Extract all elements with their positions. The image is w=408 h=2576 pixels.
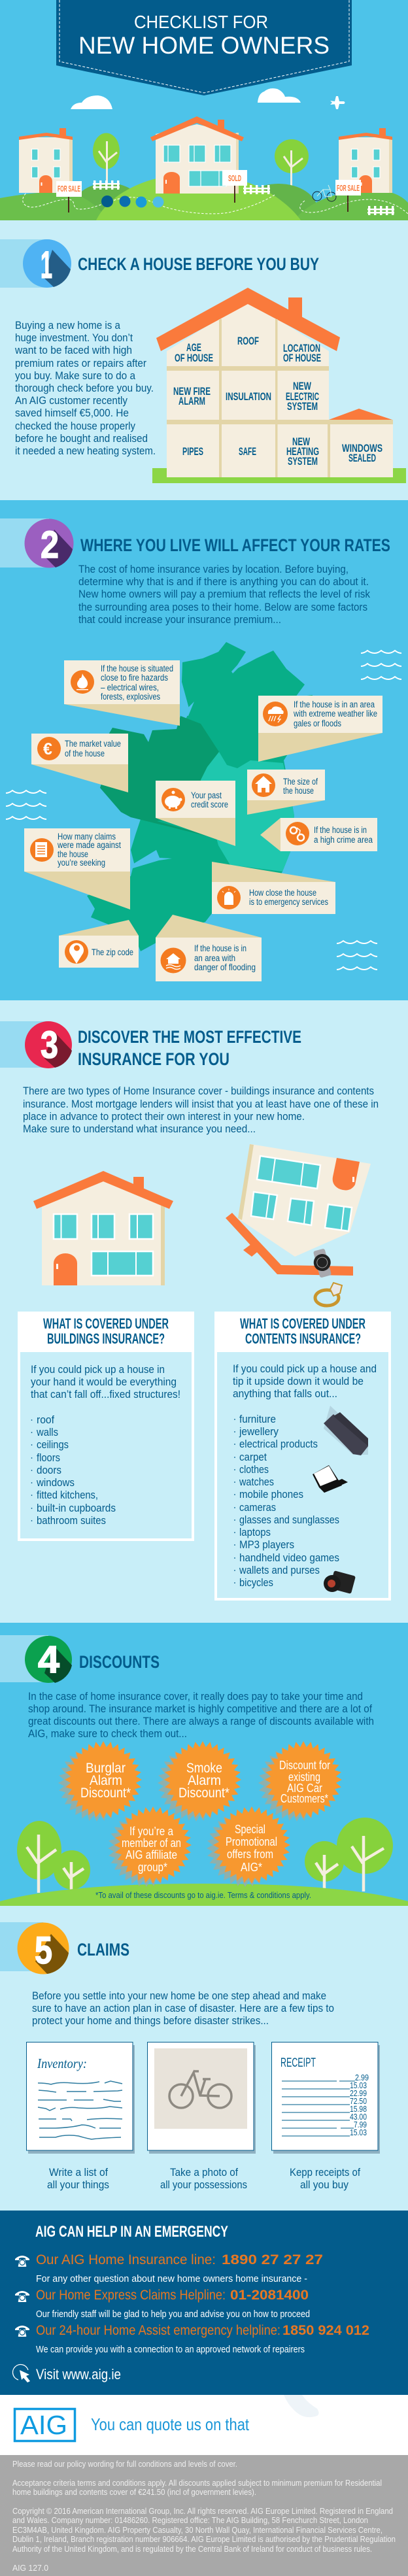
icon: euro: € [43, 740, 52, 758]
panel: buildings insurance: windows [36, 1476, 75, 1489]
badge: promotional offers: Promotional [226, 1835, 277, 1848]
icon: siren [217, 886, 241, 909]
caption: photo: all your possessions [160, 2178, 247, 2191]
panel: buildings insurance: If you could pick up a house in [31, 1363, 165, 1376]
card: receipt: 7.99 [354, 2120, 367, 2129]
icon: storm cloud [263, 702, 288, 726]
callout: claims history: How many claims [58, 832, 116, 841]
badge: burglar alarm: Alarm [90, 1773, 122, 1788]
heading 3 [78, 1027, 301, 1069]
panel: legal footer: and Wales. Company number: 01486260. Registered office: The AIG Building, 58 Fenchurch Street, London [12, 2516, 368, 2525]
caption: receipts [290, 2166, 360, 2191]
panel: buildings insurance [18, 1312, 194, 1541]
panel: contents insurance: laptops [239, 1526, 271, 1538]
house checklist diagram: NEW [292, 436, 310, 448]
helpline: home assist: Our 24-hour Home Assist emergency helpline: [36, 2323, 280, 2338]
panel: contents insurance: If you could pick up a house and [233, 1363, 377, 1375]
house checklist diagram: INSULATION [226, 391, 271, 403]
text: intro: In the case of home insurance cover, it really does pay to take your time and [28, 1690, 363, 1703]
badge: promotional offers: Special [235, 1823, 265, 1836]
callout: fire hazards: forests, explosives [101, 692, 160, 702]
footnote: *To avail of these discounts go to aig.ie. Terms & conditions apply. [95, 1890, 311, 1900]
panel: legal footer [0, 2455, 408, 2576]
text: intro: the surrounding area poses to their home. Below are some factors [78, 601, 367, 613]
panel: contents insurance: bicycles [239, 1576, 273, 1589]
panel: contents insurance: cameras [239, 1501, 276, 1514]
house checklist diagram [152, 288, 406, 483]
text: intro: shop around. The insurance market is highly competitive and there are a lot of [28, 1703, 372, 1715]
panel: legal footer: EC3M4AB, United Kingdom. AIG Property Casualty, 30 North Wall Quay, International Financial Services Centre, [12, 2526, 382, 2535]
badge: promotional offers: offers from [227, 1848, 273, 1861]
icon: piggy bank [162, 788, 185, 811]
callout: credit score: credit score [191, 800, 228, 809]
badge: smoke alarm: Smoke [186, 1761, 222, 1776]
panel: buildings insurance: bathroom suites [37, 1514, 106, 1527]
panel: contents insurance: MP3 players [239, 1538, 294, 1551]
text: intro: An AIG customer recently [15, 394, 128, 407]
illustration: upright house [33, 1171, 173, 1285]
heading 4: DISCOUNTS [79, 1652, 160, 1672]
panel: legal footer: Please read our policy wording for full conditions and levels of cover. [12, 2460, 237, 2469]
callout: extreme weather [258, 696, 382, 762]
heading 3: DISCOVER THE MOST EFFECTIVE [78, 1027, 301, 1047]
house checklist diagram: WINDOWS [342, 443, 382, 454]
house checklist diagram: SYSTEM [287, 401, 318, 413]
text: intro [28, 1690, 374, 1740]
panel: contents insurance: glasses and sunglasses [239, 1514, 339, 1526]
callout: flooding: If the house is in [194, 943, 246, 953]
panel: legal footer: Authority of the United Kingdom, and is regulated by the Central Bank of Ireland for conduct of business rules. [12, 2545, 372, 2554]
callout: flooding: danger of flooding [194, 962, 256, 972]
text: intro: sure to have an action plan in case of disaster. Here are a few tips to [32, 2002, 334, 2014]
card: receipt: 72.50 [350, 2096, 367, 2106]
badge: car customers: Discount for [279, 1759, 330, 1772]
helpline: insurance line: 1890 27 27 27 [222, 2252, 323, 2267]
heading 3: INSURANCE FOR YOU [78, 1049, 230, 1069]
text: repairers: We can provide you with a connection to an approved network of repairers [36, 2344, 305, 2355]
text: intro: thorough check before you buy. [15, 382, 154, 394]
icon: house [252, 773, 275, 797]
house checklist diagram: AGE [186, 342, 201, 354]
icon: bicycle [313, 185, 336, 201]
panel: contents insurance: watches [239, 1476, 274, 1488]
icon: document [30, 838, 54, 862]
callout: credit score [156, 781, 235, 846]
house checklist diagram: NEW FIRE [173, 386, 211, 398]
icon: camera [324, 1570, 356, 1594]
card: inventory [26, 2042, 135, 2154]
text: intro [23, 1085, 379, 1135]
text: friendly staff: Our friendly staff will be glad to help you and advise you on how to proceed [36, 2309, 310, 2320]
callout: extreme weather: gales or floods [294, 719, 341, 728]
text: intro: you buy. Make sure to do a [15, 369, 135, 382]
panel: contents insurance: wallets and purses [239, 1564, 320, 1576]
text: intro: checked the house properly [15, 420, 135, 432]
sign: for sale left: FOR SALE [58, 184, 80, 194]
card: receipt: 15.98 [350, 2104, 367, 2114]
icon: cursor [13, 2365, 30, 2382]
sign: for sale right: FOR SALE [337, 183, 360, 193]
panel: contents insurance: anything that falls out... [233, 1387, 337, 1400]
panel: contents insurance: furniture [239, 1413, 276, 1425]
number badge 1 [0, 239, 71, 288]
tagline: You can quote us on that [91, 2415, 250, 2434]
number badge 3: 3 [41, 1024, 58, 1066]
banner with title: CHECKLIST FOR [134, 12, 268, 32]
hills [0, 178, 408, 237]
text: intro: Make sure to understand what insurance you need... [23, 1123, 256, 1135]
icon: phone [15, 2291, 29, 2302]
house checklist diagram: SYSTEM [288, 456, 318, 467]
text: intro: The cost of home insurance varies by location. Before buying, [78, 563, 348, 575]
number badge 4 [0, 1635, 72, 1683]
badge: car customers: Customers* [280, 1792, 328, 1805]
icon: phone [15, 2256, 29, 2267]
panel: buildings insurance: fitted kitchens, [37, 1489, 98, 1501]
text: intro: determine why that is and if there is anything you can do about it. [78, 575, 369, 588]
panel: buildings insurance: doors [37, 1464, 61, 1476]
link: website: Visit www.aig.ie [36, 2366, 121, 2382]
sign: sold: SOLD [228, 173, 241, 183]
caption: inventory: Write a list of [49, 2166, 108, 2178]
panel: buildings insurance: WHAT IS COVERED UNDER [43, 1315, 169, 1332]
text: intro: protect your home and things before disaster strikes... [32, 2014, 269, 2027]
text: intro: Buying a new home is a [15, 319, 120, 331]
text: intro: that could increase your insurance premium... [78, 613, 281, 626]
text: other questions: For any other question about new home owners home insurance - [36, 2273, 307, 2284]
panel: contents insurance [214, 1312, 391, 1601]
card: receipt [272, 2042, 380, 2154]
caption: inventory [47, 2166, 109, 2191]
card: receipt: 43.00 [350, 2112, 367, 2122]
card: inventory: Inventory: [37, 2056, 87, 2071]
house checklist diagram: ALARM [178, 396, 205, 407]
caption: inventory: all your things [47, 2178, 109, 2191]
icon: handcuffs [286, 822, 309, 845]
caption: photo [160, 2166, 247, 2191]
icon: wristwatch [311, 1247, 334, 1279]
sign: for sale left [56, 181, 82, 212]
callout: high crime area: If the house is in [314, 825, 367, 835]
map of Ireland [87, 642, 313, 951]
badge: car customers [258, 1741, 342, 1822]
helpline: home assist: 1850 924 012 [282, 2323, 369, 2338]
sign: for sale right [335, 180, 361, 212]
text: intro: before he bought and realised [15, 432, 148, 445]
number badge 5: 5 [35, 1929, 52, 1972]
callout: high crime area [260, 818, 377, 851]
panel: section 5 claims [0, 1906, 408, 2211]
callout: extreme weather: If the house is in an area [294, 700, 375, 709]
panel: buildings insurance: built-in cupboards [37, 1502, 116, 1514]
card: receipt: 2.99 [355, 2073, 369, 2082]
callout: flooding [156, 915, 262, 981]
callout: emergency services [212, 862, 335, 914]
house checklist diagram: OF HOUSE [175, 352, 213, 364]
badge: car customers: existing [288, 1771, 320, 1784]
caption: receipts: all you buy [300, 2178, 348, 2191]
panel: buildings insurance: your hand it would be everything [31, 1376, 177, 1388]
callout: market value: The market value [65, 739, 121, 749]
dots [101, 195, 163, 208]
callout: zip code [59, 920, 139, 968]
panel: section 2 where you live [0, 500, 408, 1000]
house: centre sold [150, 116, 244, 194]
house checklist diagram: ROOF [237, 335, 259, 347]
number badge 3 [0, 1021, 72, 1068]
badge: smoke alarm: Alarm [188, 1773, 221, 1788]
callout: claims history: the house [58, 849, 88, 859]
callout: fire hazards [64, 660, 180, 726]
panel: section 1 check a house [0, 220, 408, 500]
callout: credit score: Your past [191, 790, 222, 800]
card: receipt: 22.99 [350, 2088, 367, 2098]
text: intro: want to be faced with high [14, 344, 132, 356]
panel: buildings insurance: BUILDINGS INSURANCE? [47, 1330, 165, 1347]
helpline: insurance line: Our AIG Home Insurance line: [36, 2252, 216, 2267]
badge: promotional offers [207, 1806, 290, 1887]
number badge 4: 4 [38, 1638, 60, 1681]
panel: legal footer: AIG 127.0 [12, 2564, 48, 2573]
logo: AIG: AIG [20, 2410, 67, 2440]
badge: burglar alarm [58, 1741, 142, 1822]
panel: buildings insurance: ceilings [37, 1438, 69, 1451]
icon: flooded house [161, 948, 186, 973]
panel: section 4 discounts [0, 1623, 408, 1906]
badge: affiliate group [108, 1806, 192, 1887]
callout: size of house: The size of [283, 777, 318, 787]
card: photo of bicycle [148, 2042, 256, 2154]
panel: section 3 insurance [0, 1000, 408, 1623]
text: intro [32, 1990, 334, 2027]
badge: affiliate group: group* [138, 1861, 167, 1874]
illustration: upside-down house [226, 1144, 371, 1306]
helpline: claims: Our Home Express Claims Helpline: [36, 2288, 226, 2303]
panel: contents insurance: handheld video games [239, 1551, 339, 1564]
number badge 5 [0, 1922, 69, 1974]
waves [6, 651, 401, 970]
callout: market value: of the house [65, 749, 105, 758]
heading 1: CHECK A HOUSE BEFORE YOU BUY [78, 254, 319, 274]
heading: emergency: AIG CAN HELP IN AN EMERGENCY [35, 2223, 228, 2241]
panel: contents insurance: mobile phones [239, 1488, 303, 1500]
callout: size of house [247, 770, 325, 815]
callout: zip code: The zip code [92, 947, 133, 957]
card: receipt: RECEIPT [280, 2056, 316, 2070]
callout: size of house: the house [283, 786, 314, 796]
callout: flooding: an area with [194, 953, 235, 963]
card: receipt: 15.03 [350, 2080, 367, 2090]
trees and hill [0, 1818, 408, 1906]
house checklist diagram: PIPES [182, 446, 203, 458]
callout: claims history [24, 828, 130, 909]
house: right for sale [339, 128, 392, 193]
dashed paths [23, 191, 408, 214]
number badge 2 [0, 518, 73, 568]
clouds [71, 88, 301, 109]
sign: sold [222, 170, 247, 203]
icon: flame [71, 670, 94, 694]
caption: photo: Take a photo of [170, 2166, 238, 2178]
badge: burglar alarm: Discount* [80, 1786, 131, 1801]
badge: promotional offers: AIG* [241, 1861, 262, 1874]
icon: laptop [313, 1465, 348, 1493]
text: intro: great discounts out there. There are always a range of discounts available with [28, 1715, 374, 1727]
panel: AIG logo strip [0, 2395, 408, 2455]
number badge 1: 1 [41, 244, 52, 286]
callout: fire hazards: close to fire hazards [101, 673, 168, 683]
panel: buildings insurance: that can’t fall off...fixed structures! [31, 1388, 180, 1400]
panel: contents insurance: jewellery [239, 1425, 279, 1438]
callout: market value [31, 734, 128, 792]
icon: sofa [324, 1406, 368, 1455]
text: intro: premium rates or repairs after [15, 357, 146, 369]
panel: contents insurance: tip it upside down it would be [233, 1375, 364, 1387]
badge: affiliate group: member of an [122, 1837, 181, 1850]
text: intro: it needed a new heating system. [15, 445, 156, 457]
icon: gold ring [315, 1283, 342, 1306]
badge: affiliate group: AIG affiliate [126, 1848, 177, 1861]
text: intro: huge investment. You don’t [15, 331, 133, 344]
panel: buildings insurance: walls [36, 1426, 58, 1438]
text: intro: Before you settle into your new home be one step ahead and make [32, 1990, 326, 2002]
house checklist diagram: OF HOUSE [283, 352, 321, 364]
callout: fire hazards: If the house is situated [101, 664, 173, 673]
panel: legal footer: home buildings and contents cover of €241.50 (incl of government levies). [12, 2488, 256, 2497]
panel: contents insurance: electrical products [239, 1438, 318, 1450]
badge: car customers: AIG Car [287, 1782, 322, 1795]
panel: emergency contacts [0, 2211, 408, 2395]
house: left for sale [19, 128, 73, 193]
banner with title [56, 0, 352, 95]
badge: burglar alarm: Burglar [86, 1761, 126, 1776]
callout: emergency services: How close the house [249, 888, 316, 898]
text: intro [78, 563, 370, 626]
badge: smoke alarm [158, 1741, 241, 1822]
caption: receipts: Kepp receipts of [290, 2166, 360, 2178]
house checklist diagram: SAFE [239, 446, 256, 458]
number badge 2: 2 [41, 524, 59, 566]
panel: buildings insurance: roof [37, 1414, 54, 1426]
badge: smoke alarm: Discount* [178, 1786, 230, 1801]
text: intro: saved himself €5,000. He [15, 407, 129, 419]
text: intro: place in advance to protect their own interest in your new home. [23, 1110, 305, 1123]
callout: claims history: were made against [57, 840, 121, 850]
icon: map pin [65, 940, 88, 964]
text: intro: AIG, make sure to check them out... [28, 1727, 187, 1740]
heading 5: CLAIMS [77, 1940, 129, 1959]
icon: euro [37, 737, 61, 760]
panel: contents insurance: carpet [239, 1451, 267, 1463]
house checklist diagram: ELECTRIC [286, 391, 319, 403]
callout: emergency services: is to emergency services [249, 897, 328, 907]
helpline: claims: 01-2081400 [230, 2288, 309, 2303]
icon: plane [330, 96, 345, 109]
panel: contents insurance: clothes [239, 1463, 269, 1476]
trees [93, 133, 309, 190]
house checklist diagram: SEALED [348, 452, 376, 464]
callout: fire hazards: – electrical wires, [101, 683, 159, 692]
panel: buildings insurance: floors [37, 1451, 60, 1464]
banner with title: NEW HOME OWNERS [78, 32, 330, 59]
helpline: insurance line [36, 2252, 323, 2267]
text: intro: New home owners will pay a premium that reflects the level of risk [78, 588, 370, 600]
badge: affiliate group: If you’re a [129, 1825, 174, 1838]
icon: phone [15, 2326, 29, 2337]
callout: extreme weather: with extreme weather like [293, 709, 377, 719]
house checklist diagram: HEATING [286, 446, 319, 458]
picket fences [93, 180, 394, 215]
callout: claims history: you’re seeking [58, 858, 105, 868]
house checklist diagram: NEW [293, 381, 311, 392]
text: intro [14, 319, 156, 457]
card: receipt: 15.03 [350, 2127, 367, 2137]
panel: header hero [0, 0, 408, 237]
house checklist diagram: LOCATION [283, 343, 320, 354]
callout: high crime area: a high crime area [314, 835, 373, 845]
